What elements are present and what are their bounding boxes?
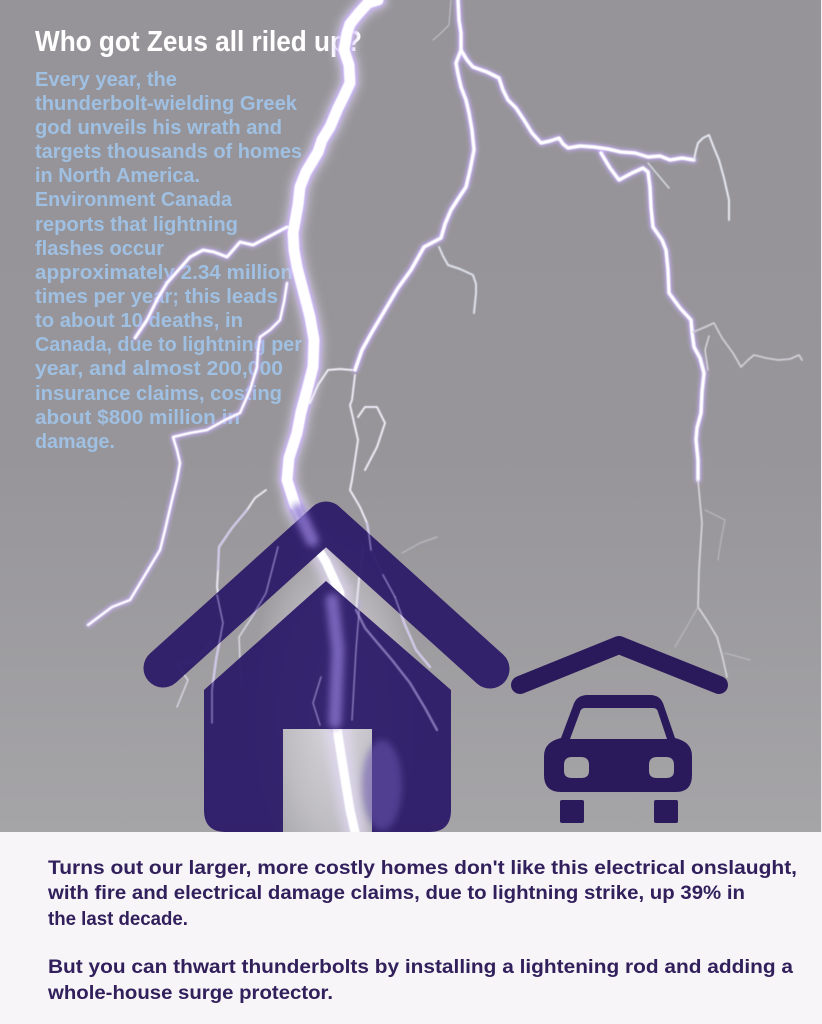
car right wheel <box>654 800 678 823</box>
bolt band over house body <box>332 600 338 722</box>
intro text block: insurance claims, costing <box>35 383 282 405</box>
bottom panel <box>0 832 822 1024</box>
bolt wide glow <box>287 0 378 832</box>
carport roof <box>520 645 719 685</box>
intro text block: targets thousands of homes <box>35 141 302 163</box>
intro text block: Environment Canada <box>35 189 233 211</box>
intro text block: god unveils his wrath and <box>35 117 282 139</box>
intro text block: Canada, due to lightning per <box>35 334 302 356</box>
intro text block <box>35 69 302 453</box>
bottom text block: But you can thwart thunderbolts by installing a lightening rod and adding a <box>48 956 793 978</box>
car body <box>544 695 692 792</box>
intro text block: to about 10 deaths, in <box>35 310 243 332</box>
intro text block: reports that lightning <box>35 214 238 236</box>
intro text block: flashes occur <box>35 238 164 260</box>
bolt core strands <box>88 0 802 832</box>
bottom text block <box>47 857 797 1004</box>
bottom text block: whole-house surge protector. <box>47 982 333 1004</box>
bolt purple fringe <box>88 0 704 625</box>
intro text block: year, and almost 200,000 <box>35 358 283 380</box>
icon: house <box>163 521 490 832</box>
bottom text block: the last decade. <box>48 908 188 930</box>
icon: car under carport <box>520 645 719 823</box>
intro text block: in North America. <box>35 165 200 187</box>
house body with door opening <box>204 581 451 832</box>
intro text block: about $800 million in <box>35 407 240 429</box>
house roof <box>163 521 490 669</box>
intro text block: approximately 2.34 million <box>35 262 293 284</box>
bottom text block: Turns out our larger, more costly homes don't like this electrical onslaught, <box>48 857 797 879</box>
car left wheel <box>560 800 584 823</box>
thin strands over house <box>212 510 437 730</box>
glow beside door <box>362 740 402 830</box>
intro text block: Every year, the <box>35 69 177 91</box>
intro text block: times per year; this leads <box>35 286 278 308</box>
bottom text block: with fire and electrical damage claims, due to lightning strike, up 39% in <box>47 882 745 904</box>
bolt band over roof <box>298 510 312 540</box>
intro text block: damage. <box>35 431 115 453</box>
lightning showing through house <box>212 510 437 830</box>
intro text block: thunderbolt-wielding Greek <box>35 93 298 115</box>
lightning bolt <box>88 0 802 832</box>
title: Who got Zeus all riled up? <box>35 26 362 58</box>
